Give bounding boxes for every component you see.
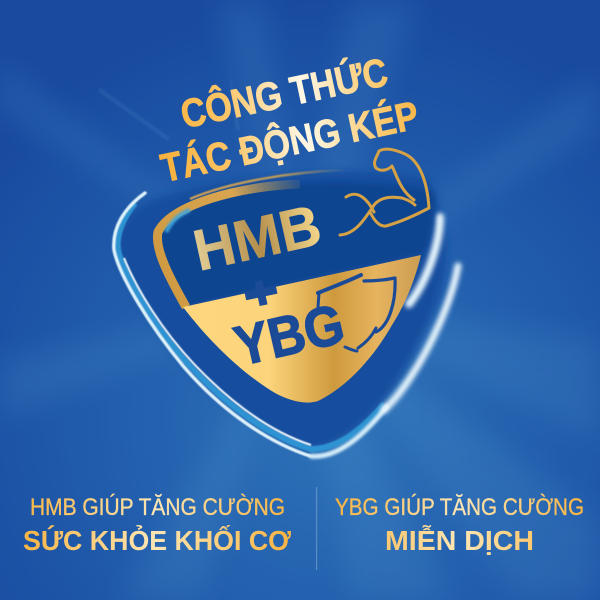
left caption: SỨC KHỎE KHỐI CƠ	[23, 524, 291, 556]
white rim right	[409, 217, 440, 304]
title: CÔNG THỨC	[177, 48, 392, 137]
gold lower panel	[183, 255, 421, 403]
title	[157, 48, 423, 191]
shield body glow	[117, 172, 446, 450]
icon: shield outline	[318, 275, 395, 351]
label: HMB: HMB	[188, 193, 327, 284]
white rim left and bottom	[114, 193, 310, 456]
navy upper panel	[158, 183, 434, 306]
badge shield	[114, 170, 458, 456]
label: YBG: YBG	[229, 292, 350, 378]
gold swoosh arc above shield	[190, 170, 345, 199]
gold rim of inner shield	[157, 184, 300, 307]
divider	[316, 487, 317, 570]
bottom tip rim	[310, 405, 388, 456]
left caption: HMB GIÚP TĂNG CƯỜNG	[30, 494, 285, 521]
plus sign	[243, 277, 279, 309]
cyan band of rim	[118, 203, 384, 449]
cyan highlight inside rim	[166, 210, 190, 232]
right caption	[335, 494, 584, 556]
left caption	[23, 494, 291, 556]
right caption: MIỄN DỊCH	[385, 525, 534, 556]
icon: flexed arm	[340, 149, 429, 235]
title: TÁC ĐỘNG KÉP	[157, 92, 423, 191]
